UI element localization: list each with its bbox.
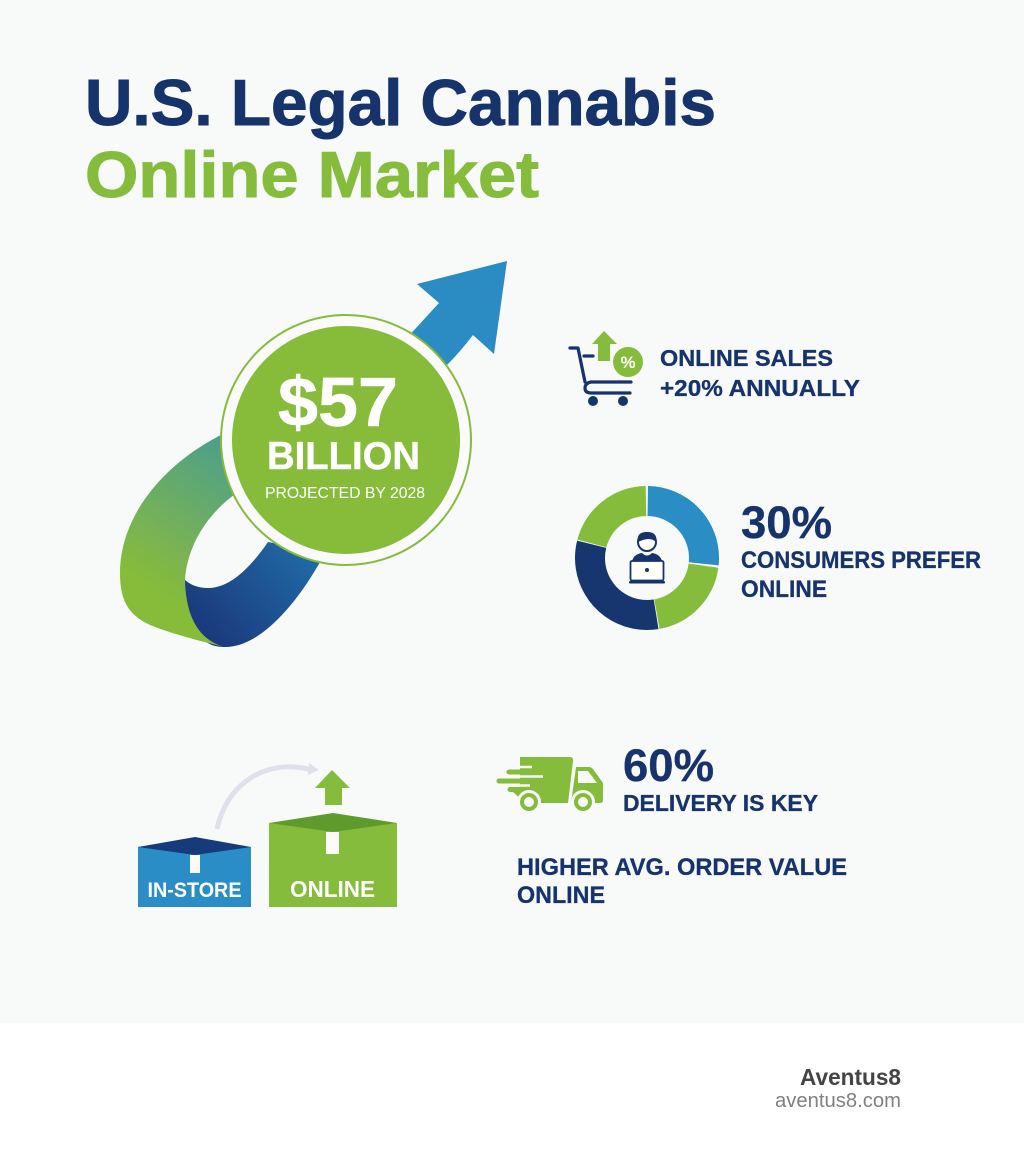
delivery text: 60% (623, 740, 714, 791)
in-store box: IN-STORE (148, 879, 242, 902)
ribbon green section (120, 433, 238, 647)
order value text: HIGHER AVG. ORDER VALUE (517, 854, 847, 881)
title: Online Market (85, 138, 539, 211)
online sales text: +20% ANNUALLY (660, 375, 860, 401)
big number badge (221, 315, 471, 565)
icon: shopping cart (570, 331, 643, 406)
consumers text: ONLINE (741, 576, 827, 603)
arrow (405, 261, 507, 365)
consumers text (741, 497, 981, 603)
big number badge: $57 (278, 363, 398, 441)
footer brand: Aventus8 (800, 1064, 901, 1090)
big number badge: BILLION (267, 435, 420, 478)
in-store box (138, 837, 251, 907)
title: U.S. Legal Cannabis (85, 66, 716, 139)
online box: ONLINE (290, 876, 375, 902)
footer brand (775, 1064, 901, 1112)
up arrow (315, 770, 350, 805)
delivery text (623, 740, 818, 816)
title (85, 66, 716, 211)
icon: shopping cart: % (620, 353, 636, 372)
big number badge: PROJECTED BY 2028 (265, 485, 425, 502)
icon: delivery truck (499, 757, 603, 812)
online box (269, 813, 397, 907)
curved arrow (217, 763, 319, 829)
order value text: ONLINE (517, 882, 605, 909)
consumers text: CONSUMERS PREFER (741, 547, 981, 574)
consumers text: 30% (741, 497, 832, 548)
donut chart (577, 488, 717, 628)
online sales text: ONLINE SALES (660, 345, 833, 371)
icon: person with laptop (629, 532, 665, 584)
delivery text: DELIVERY IS KEY (623, 790, 818, 816)
footer brand: aventus8.com (775, 1090, 901, 1112)
growth ribbon and arrow (120, 261, 507, 647)
ribbon blue section (185, 542, 325, 647)
order value text (517, 854, 847, 909)
online sales text (660, 345, 860, 401)
